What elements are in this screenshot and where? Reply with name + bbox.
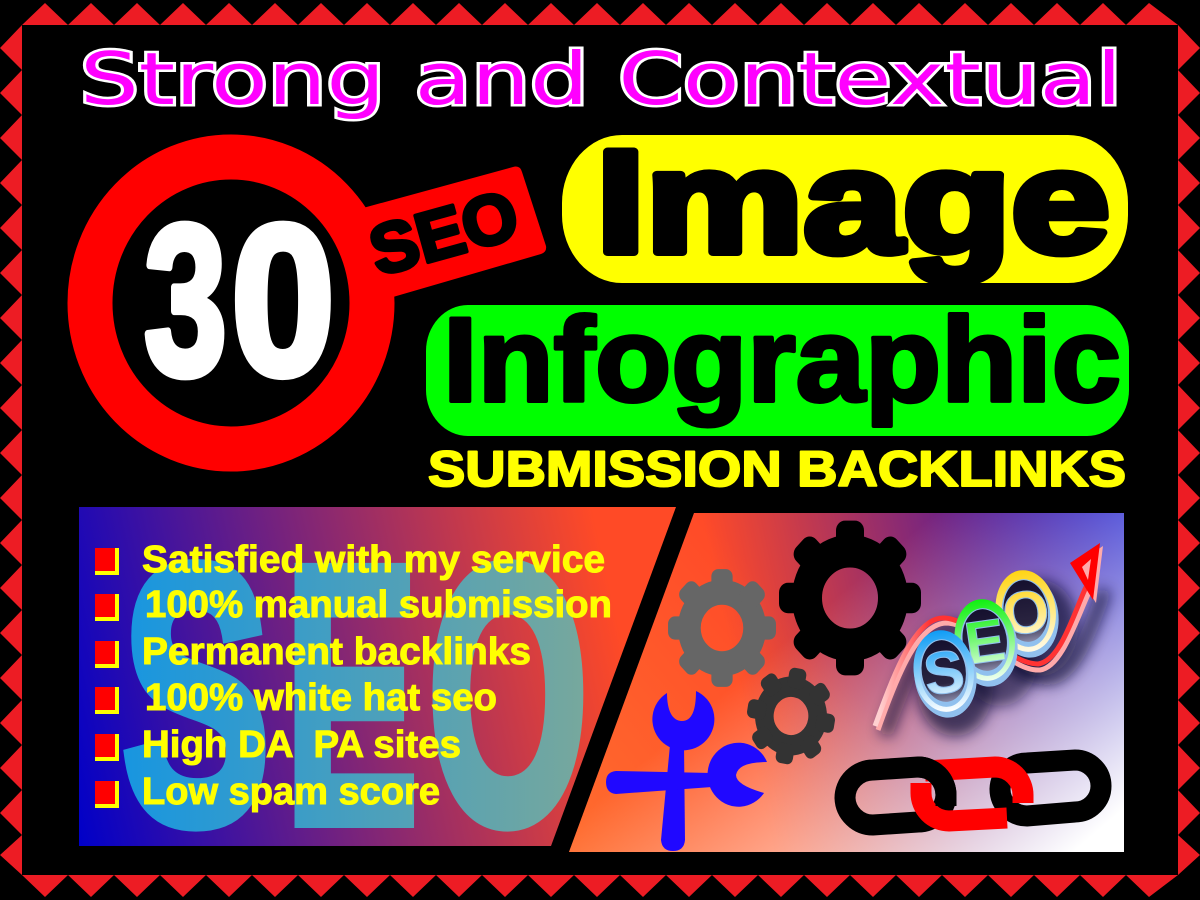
number 30: 3 [144,181,227,420]
subtitle: SUBMISSION BACKLINKS [428,441,1126,497]
watermark SEO: E [285,492,418,899]
arrow shadow [885,590,1105,735]
letter O ring: O [998,576,1054,649]
magnifier ring [90,157,372,449]
icon: chain links [845,760,1101,825]
letter O ring [990,566,1064,662]
title: Strong and Contextual [80,37,1122,121]
letter E ring [949,595,1023,691]
bullets [95,548,119,808]
letter S ring: S [919,637,968,708]
number 30 [144,181,335,420]
panel background [569,513,1124,852]
panel: SEO graphics [569,513,1124,852]
watermark SEO: S [122,492,270,899]
arrow head [1073,546,1103,603]
list text: 100% white hat seo [145,677,497,719]
icon: grey gear [668,569,776,687]
watermark SEO: O [428,492,588,899]
letter E ring: E [960,606,1009,677]
list text: Low spam score [142,771,440,813]
icon: blue wrenches [606,691,767,851]
badge: 30 SEO magnifier [90,157,546,449]
magnifier handle tag [360,167,546,312]
list text: 100% manual submission [145,584,612,626]
icon: dark gear [740,660,842,772]
arrow ribbon [878,590,1090,730]
letter S ring [908,626,982,722]
yellow pill: Image: Image [596,120,1110,283]
number 30: 0 [231,181,335,420]
watermark SEO [122,492,588,899]
panel background [79,507,676,846]
list text: Satisfied with my service [142,539,605,581]
tag text SEO: SEO [361,175,527,290]
icon: SEO arrow graphic [875,543,1105,736]
panel: feature list [79,492,676,899]
icon: black gear [779,521,921,675]
green pill: Infographic: Infographic [443,293,1121,427]
list text [142,539,612,813]
list text: High DA PA sites [142,724,461,766]
list text: Permanent backlinks [142,631,531,673]
